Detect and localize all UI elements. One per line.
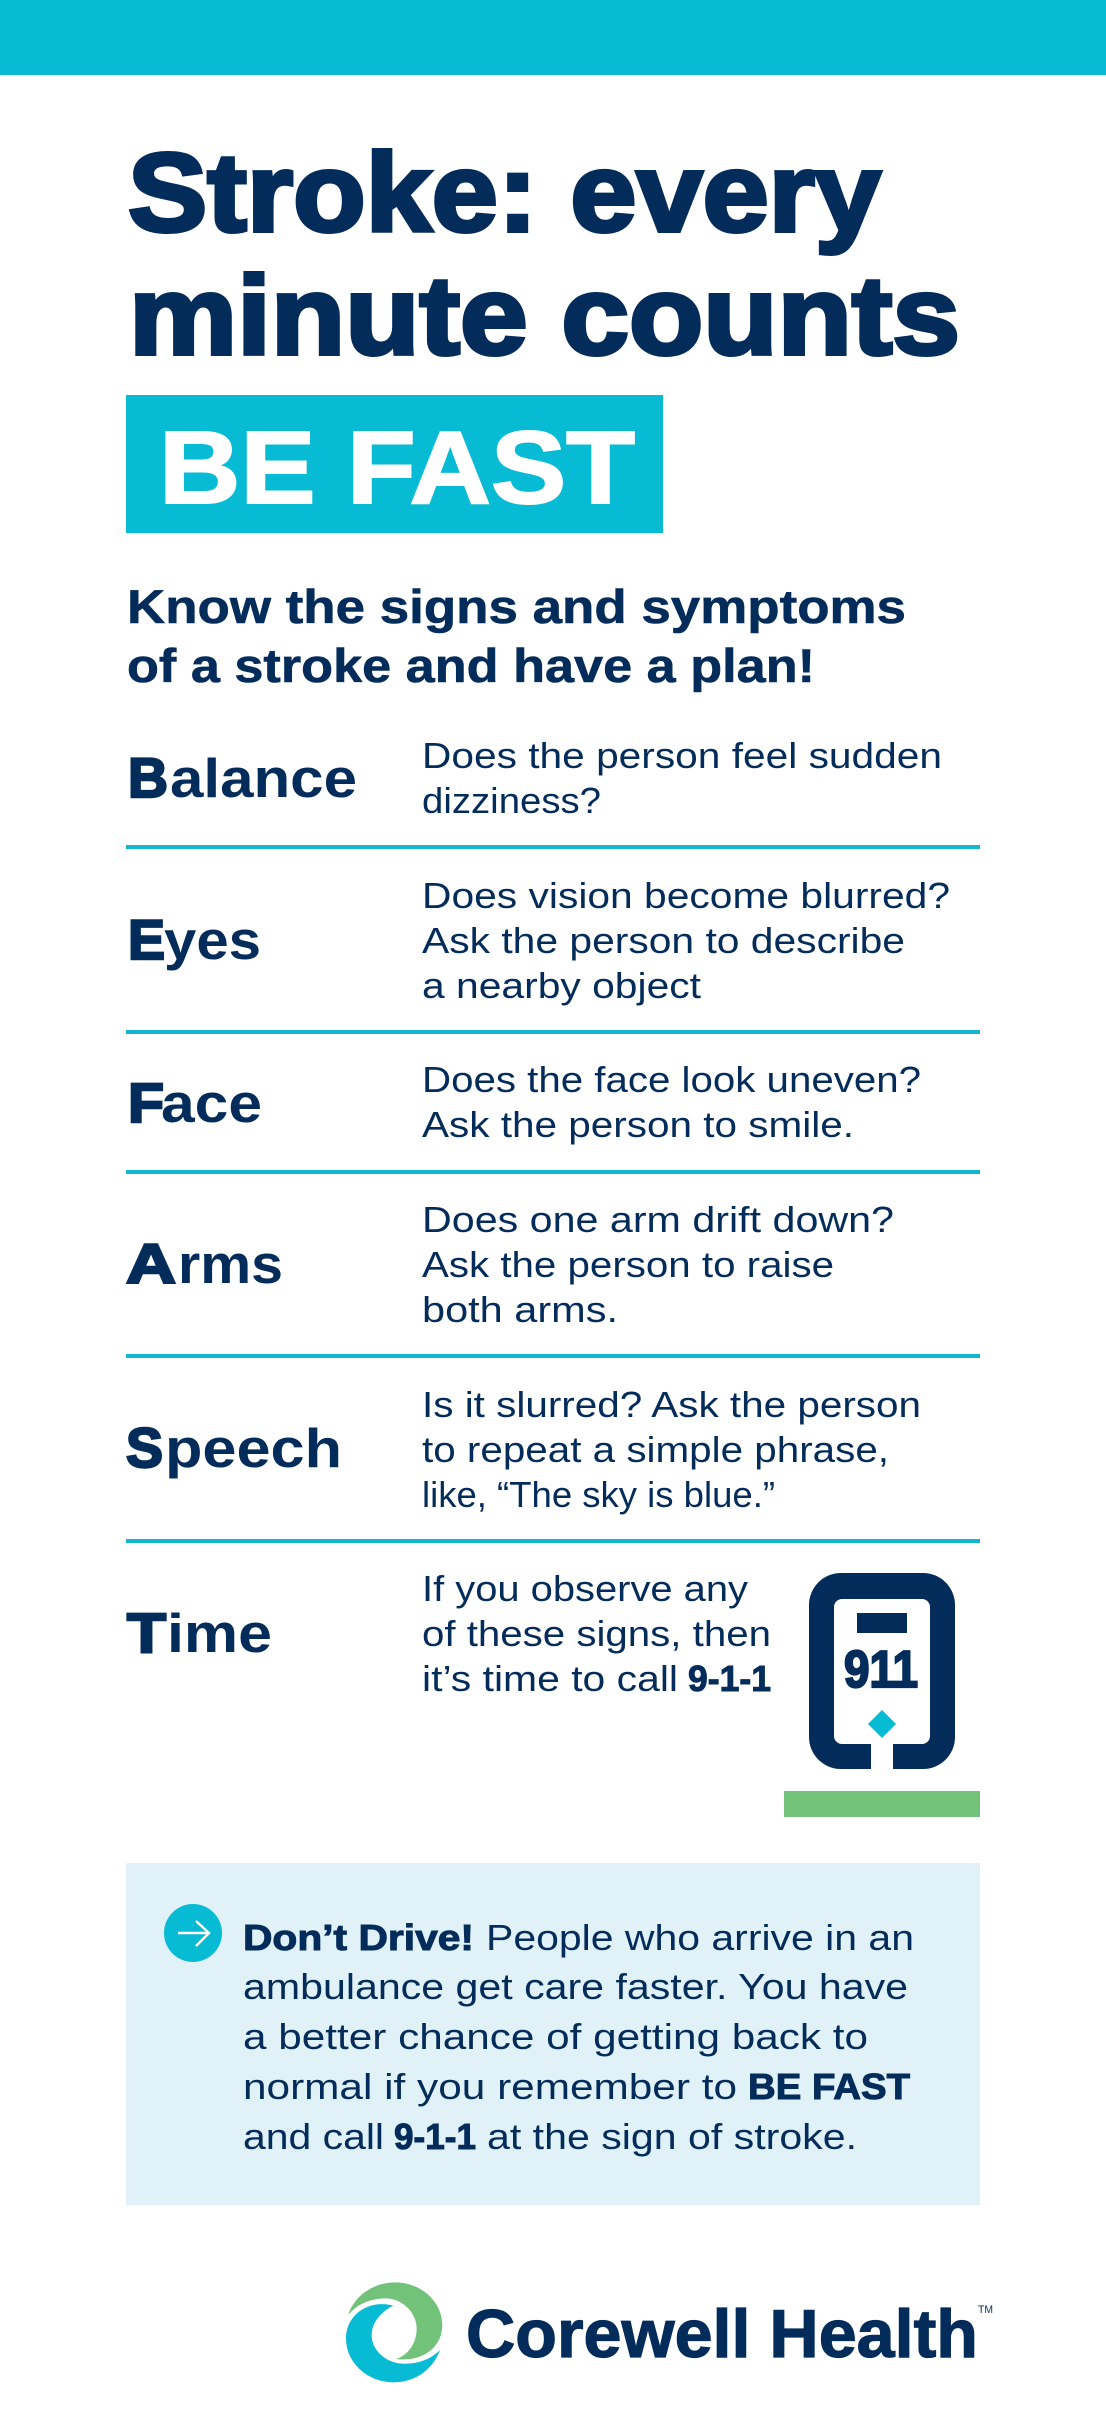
row: Eyes (128, 875, 950, 1006)
top banner (0, 0, 1106, 75)
label: Arms (126, 1232, 283, 1295)
description: Time (422, 1568, 771, 1699)
description: Balance: dizziness? (422, 780, 601, 821)
description: Speech: Is it slurred? Ask the person (422, 1384, 921, 1425)
label: Balance: alance (170, 747, 357, 809)
callout panel (126, 1863, 980, 2205)
description: Arms: Does one arm drift down? (422, 1199, 894, 1240)
label: Speech: S (126, 1416, 163, 1479)
callout text: People who arrive in an (486, 1917, 914, 1958)
callout text: normal if you remember to (243, 2066, 737, 2107)
row: Face (128, 1059, 921, 1145)
title (128, 131, 960, 378)
BE FAST badge (126, 395, 663, 533)
description: Face: Ask the person to smile. (422, 1104, 854, 1145)
description: Face: Does the face look uneven? (422, 1059, 921, 1100)
icon: phone showing 911 (809, 1573, 955, 1769)
callout text (243, 1917, 914, 2157)
label: Eyes: yes (164, 909, 261, 971)
logo mark (346, 2282, 442, 2382)
label: Face: ace (161, 1072, 262, 1134)
description: Face (422, 1059, 921, 1145)
label: Eyes (128, 908, 261, 971)
label: Speech: peech (165, 1417, 342, 1479)
row: Balance (128, 735, 942, 821)
row: Arms (126, 1199, 894, 1330)
label: Face (128, 1071, 262, 1134)
label: Arms: A (126, 1232, 176, 1295)
callout text: BE FAST (748, 2066, 910, 2107)
description: Arms: Ask the person to raise (422, 1244, 834, 1285)
label: Balance: B (128, 746, 168, 809)
description: Time: 9-1-1 (688, 1658, 771, 1699)
BE FAST badge: BE FAST (159, 410, 635, 525)
logo wordmark: Corewell Health (466, 2296, 978, 2372)
description: Eyes: Does vision become blurred? (422, 875, 950, 916)
subheading: Know the signs and symptoms (127, 580, 906, 633)
label: Time: ime (167, 1602, 272, 1664)
row: Time (127, 1568, 771, 1699)
title: minute counts (129, 254, 960, 378)
trademark: TM (978, 2304, 993, 2316)
callout text: and call (243, 2116, 384, 2157)
description: Eyes: Ask the person to describe (422, 920, 905, 961)
description: Speech (422, 1384, 921, 1515)
description: Arms (422, 1199, 894, 1330)
description: Time: it’s time to call (422, 1658, 678, 1699)
description: Balance (422, 735, 942, 821)
description: Time: If you observe any (422, 1568, 748, 1609)
callout text: at the sign of stroke. (487, 2116, 857, 2157)
callout text: ambulance get care faster. You have (243, 1966, 908, 2007)
callout text: a better chance of getting back to (243, 2016, 868, 2057)
row: Speech (126, 1384, 921, 1515)
subheading (127, 580, 906, 692)
logo: Corewell Health (346, 2282, 993, 2382)
label: Face: F (128, 1071, 164, 1134)
description: Speech: to repeat a simple phrase, (422, 1429, 889, 1470)
green base bar (784, 1791, 980, 1817)
description: Eyes: a nearby object (422, 965, 701, 1006)
label: Time (127, 1601, 272, 1664)
description: Time: of these signs, then (422, 1613, 771, 1654)
description: Balance: Does the person feel sudden (422, 735, 942, 776)
subheading: of a stroke and have a plan! (127, 639, 815, 692)
icon: phone showing 911: 911 (844, 1641, 918, 1699)
description: Speech: like, “The sky is blue.” (422, 1474, 775, 1515)
label: Eyes: E (128, 908, 165, 971)
label: Arms: rms (178, 1233, 283, 1295)
description: Arms: both arms. (422, 1289, 618, 1330)
title: Stroke: every (128, 131, 881, 255)
icon: arrow in circle (164, 1904, 222, 1962)
description: Eyes (422, 875, 950, 1006)
callout text: Don’t Drive! (243, 1917, 474, 1958)
callout text: 9-1-1 (394, 2116, 476, 2157)
label: Time: T (127, 1601, 166, 1664)
